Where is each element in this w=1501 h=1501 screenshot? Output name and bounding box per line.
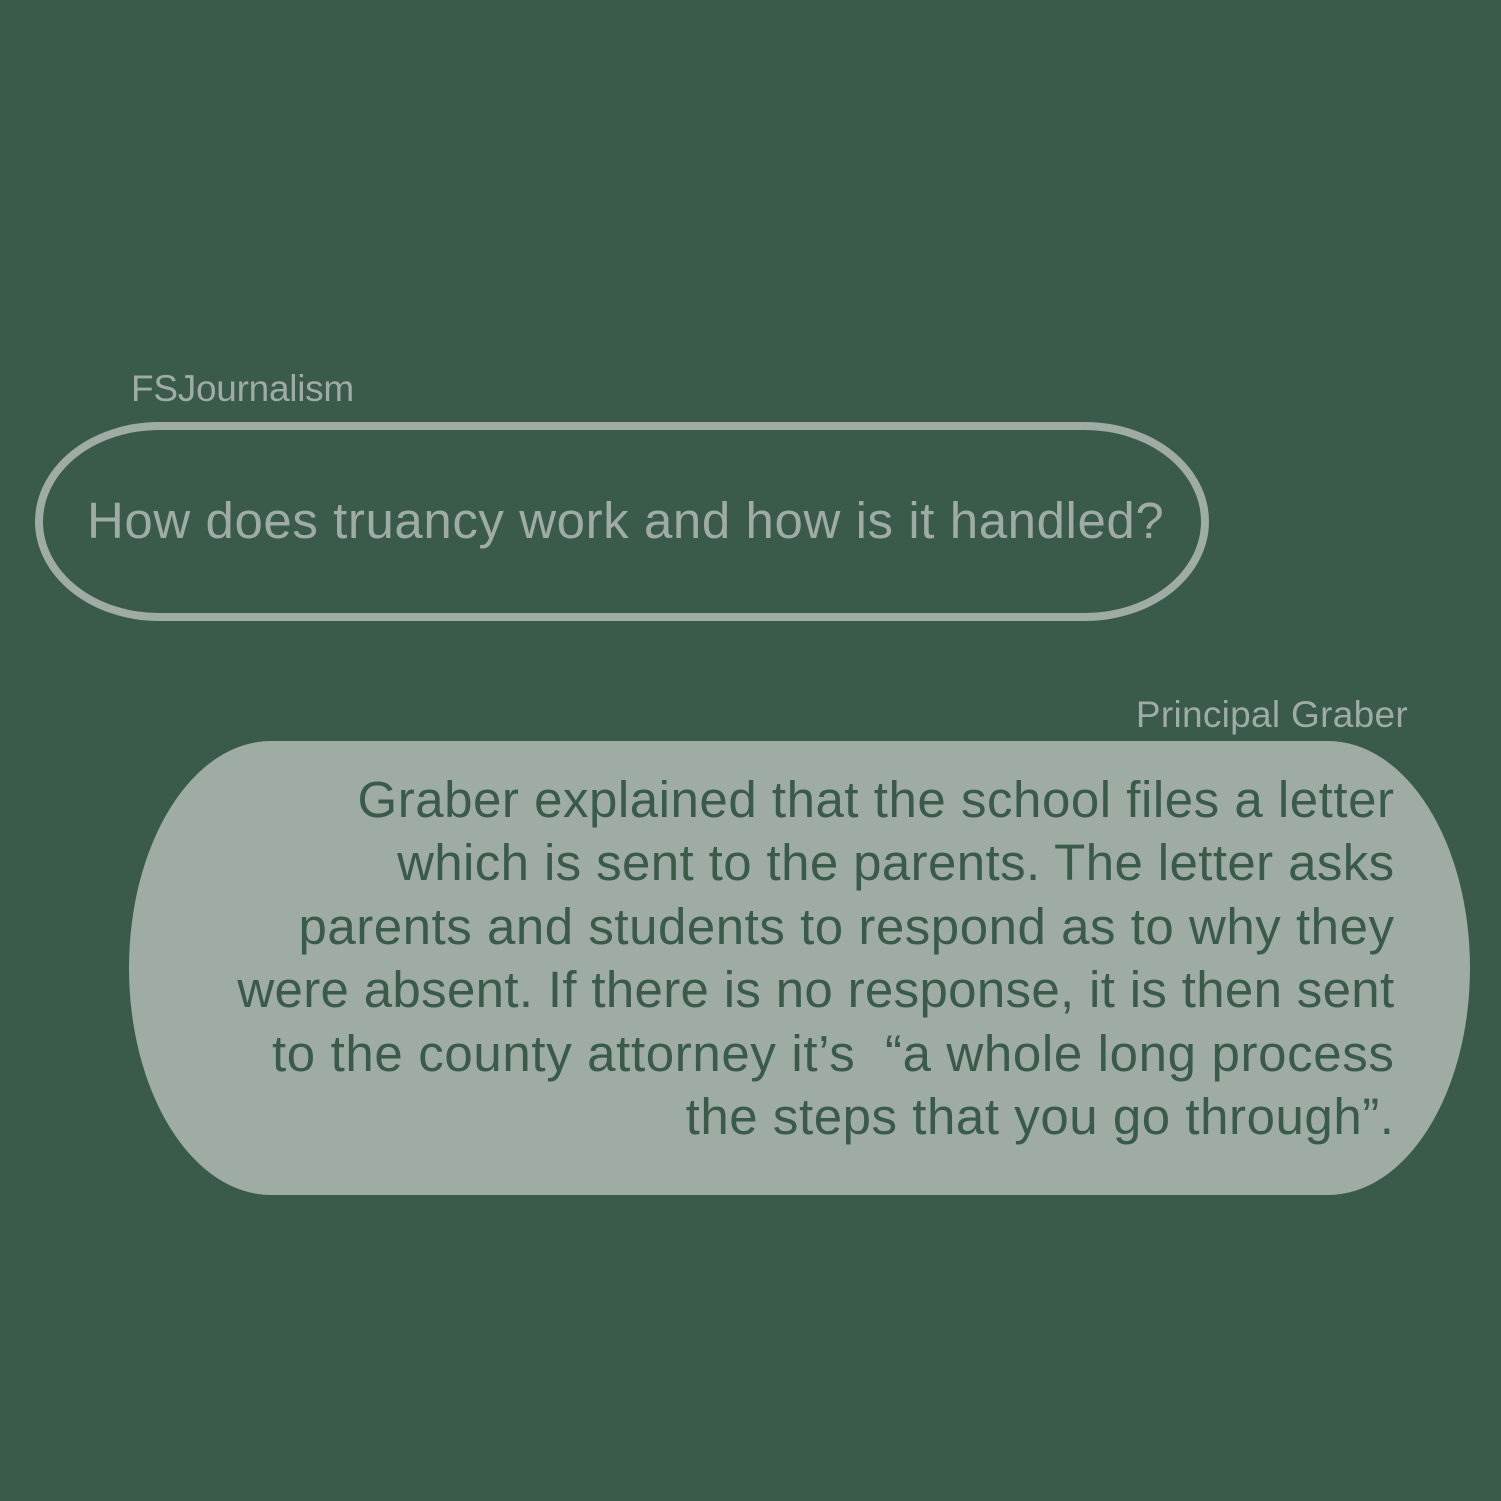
question bubble xyxy=(35,422,1209,621)
answer text xyxy=(237,771,1394,1145)
label: FSJournalism: FSJournalism xyxy=(131,368,354,409)
answer bubble xyxy=(129,741,1470,1195)
answer text: were absent. If there is no response, it is then sent xyxy=(237,961,1394,1018)
label: Principal Graber: Principal Graber xyxy=(1136,694,1408,735)
answer text: which is sent to the parents. The letter asks xyxy=(397,834,1394,891)
answer text: parents and students to respond as to why they xyxy=(298,898,1394,955)
question text: How does truancy work and how is it handled? xyxy=(87,492,1164,549)
answer text: Graber explained that the school files a letter xyxy=(358,771,1394,828)
answer text: the steps that you go through”. xyxy=(686,1088,1394,1145)
answer text: to the county attorney it’s “a whole long process xyxy=(272,1025,1394,1082)
